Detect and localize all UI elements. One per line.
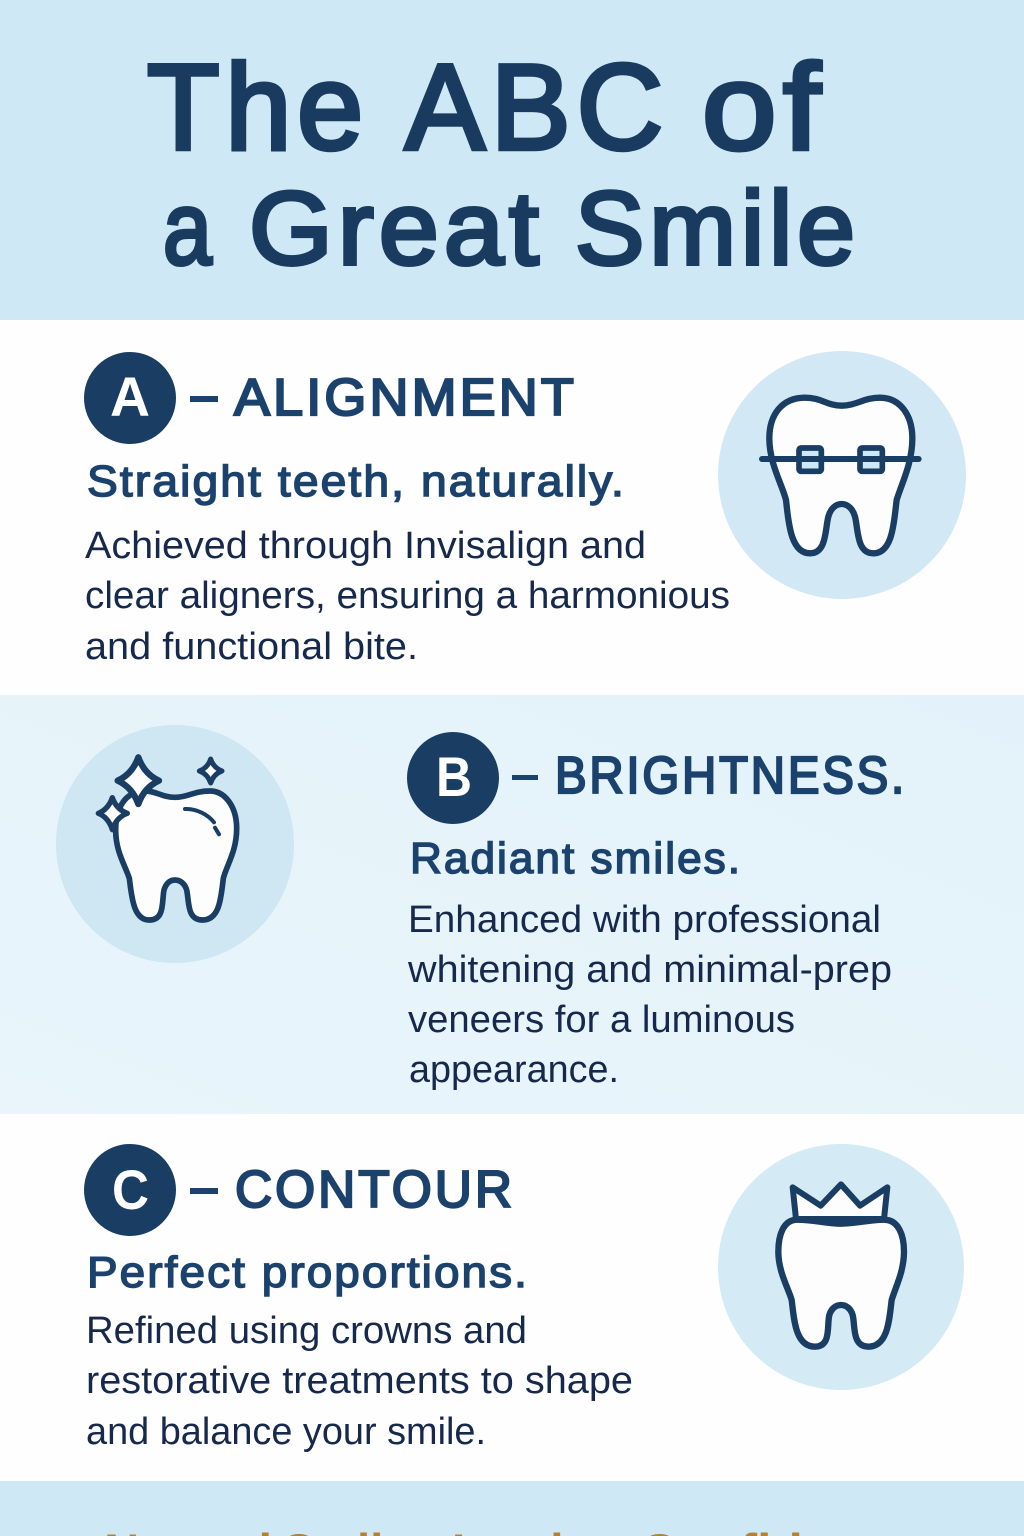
text block: brightness description: whitening and minimal-prep (407, 949, 892, 991)
text block: alignment description: Achieved through Invisalign and (85, 525, 646, 567)
icon: tooth with braces (718, 351, 966, 599)
footer text (104, 1524, 920, 1536)
text block: alignment description (85, 525, 730, 668)
title: The (147, 39, 369, 175)
icon: tooth with crown (718, 1144, 964, 1390)
title: Great (249, 171, 544, 287)
panel: C contour (0, 1114, 1024, 1481)
panel: footer tagline (0, 1481, 1024, 1536)
badge: C: C (112, 1158, 149, 1221)
text block: brightness description: veneers for a luminous (408, 999, 795, 1041)
heading: contour: CONTOUR (235, 1160, 515, 1218)
subheading: radiant smiles: Radiant smiles. (410, 834, 742, 883)
title (147, 39, 860, 287)
text block: contour description: and balance your smile. (86, 1411, 486, 1453)
subheading: perfect proportions: Perfect proportions. (87, 1248, 529, 1297)
badge: A (84, 352, 176, 444)
text block: brightness description (407, 899, 892, 1091)
badge: A: A (110, 365, 150, 428)
title: a (163, 171, 216, 287)
panel: A alignment (0, 320, 1024, 695)
badge: B: B (436, 745, 472, 808)
text block: brightness description: Enhanced with professional (408, 899, 881, 941)
subheading: straight teeth: Straight teeth, naturally. (87, 457, 626, 506)
text block: alignment description: clear aligners, ensuring a harmonious (85, 575, 730, 617)
text block: contour description: Refined using crowns and (86, 1310, 527, 1352)
text block: contour description (86, 1310, 633, 1453)
heading: brightness: BRIGHTNESS. (555, 746, 907, 804)
text block: brightness description: appearance. (409, 1049, 619, 1091)
badge: C (84, 1144, 176, 1236)
icon: sparkling tooth (56, 725, 294, 963)
title: ABC (405, 39, 669, 175)
title: of (702, 39, 827, 175)
title: Smile (575, 171, 860, 287)
text block: alignment description: and functional bite. (85, 626, 418, 668)
panel: B brightness (0, 695, 1024, 1114)
panel: title header (0, 0, 1024, 320)
text block: contour description: restorative treatments to shape (86, 1360, 633, 1402)
badge: B (407, 732, 499, 824)
heading: alignment: ALIGNMENT (234, 368, 577, 426)
